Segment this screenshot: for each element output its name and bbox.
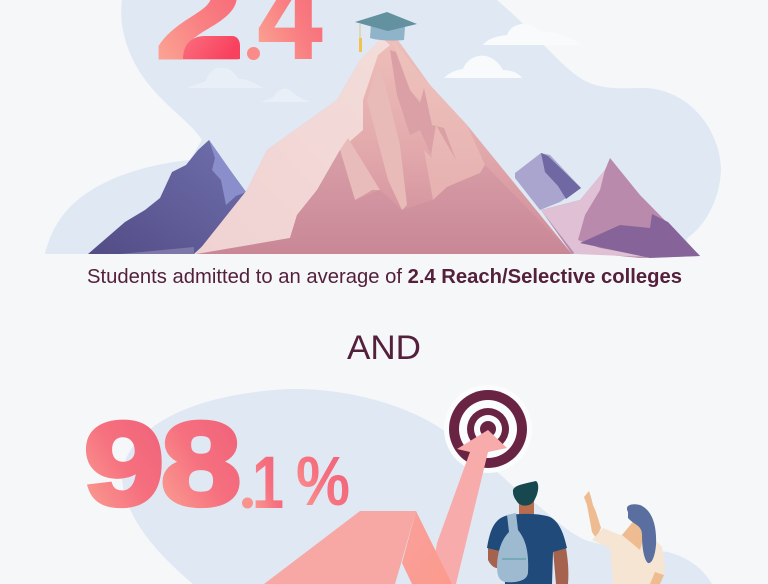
big number: 2.4 bbox=[155, 0, 322, 84]
icon: target bbox=[444, 385, 532, 473]
figure: man with backpack bbox=[487, 481, 568, 584]
big number: 98.1%: % bbox=[296, 442, 350, 520]
mountain: snow side bbox=[196, 38, 390, 254]
mountain: dark streaks bbox=[390, 50, 456, 160]
cloud: lower right bbox=[444, 56, 522, 78]
caption: Students admitted to an average of 2.4 Reach/Selective colleges bbox=[87, 265, 682, 288]
mountain: purple left bbox=[88, 140, 246, 254]
cloud: faint left bbox=[187, 68, 264, 88]
mountain: mauve front right bbox=[541, 158, 700, 258]
mountain: light facets bbox=[340, 138, 380, 200]
mountain: shaded base bbox=[202, 150, 572, 254]
arrow: rising zigzag bbox=[264, 430, 507, 584]
cloud: upper right bbox=[483, 24, 582, 45]
figure: woman pointing bbox=[584, 491, 665, 584]
big number: 98.1%: 8 bbox=[161, 398, 241, 530]
mountain: purple back right bbox=[515, 153, 581, 210]
cloud: faint small bbox=[260, 89, 311, 102]
big number: 98.1%: 9 bbox=[84, 398, 164, 530]
background blob: target bbox=[122, 389, 712, 584]
icon: graduation cap bbox=[355, 12, 417, 52]
big number: 98.1%: 1 bbox=[252, 441, 284, 524]
mountain: main peak bbox=[196, 36, 572, 254]
background blob: mountains bbox=[45, 0, 721, 254]
heading: AND: AND bbox=[347, 329, 421, 367]
big number: 98.1% bbox=[84, 398, 350, 530]
